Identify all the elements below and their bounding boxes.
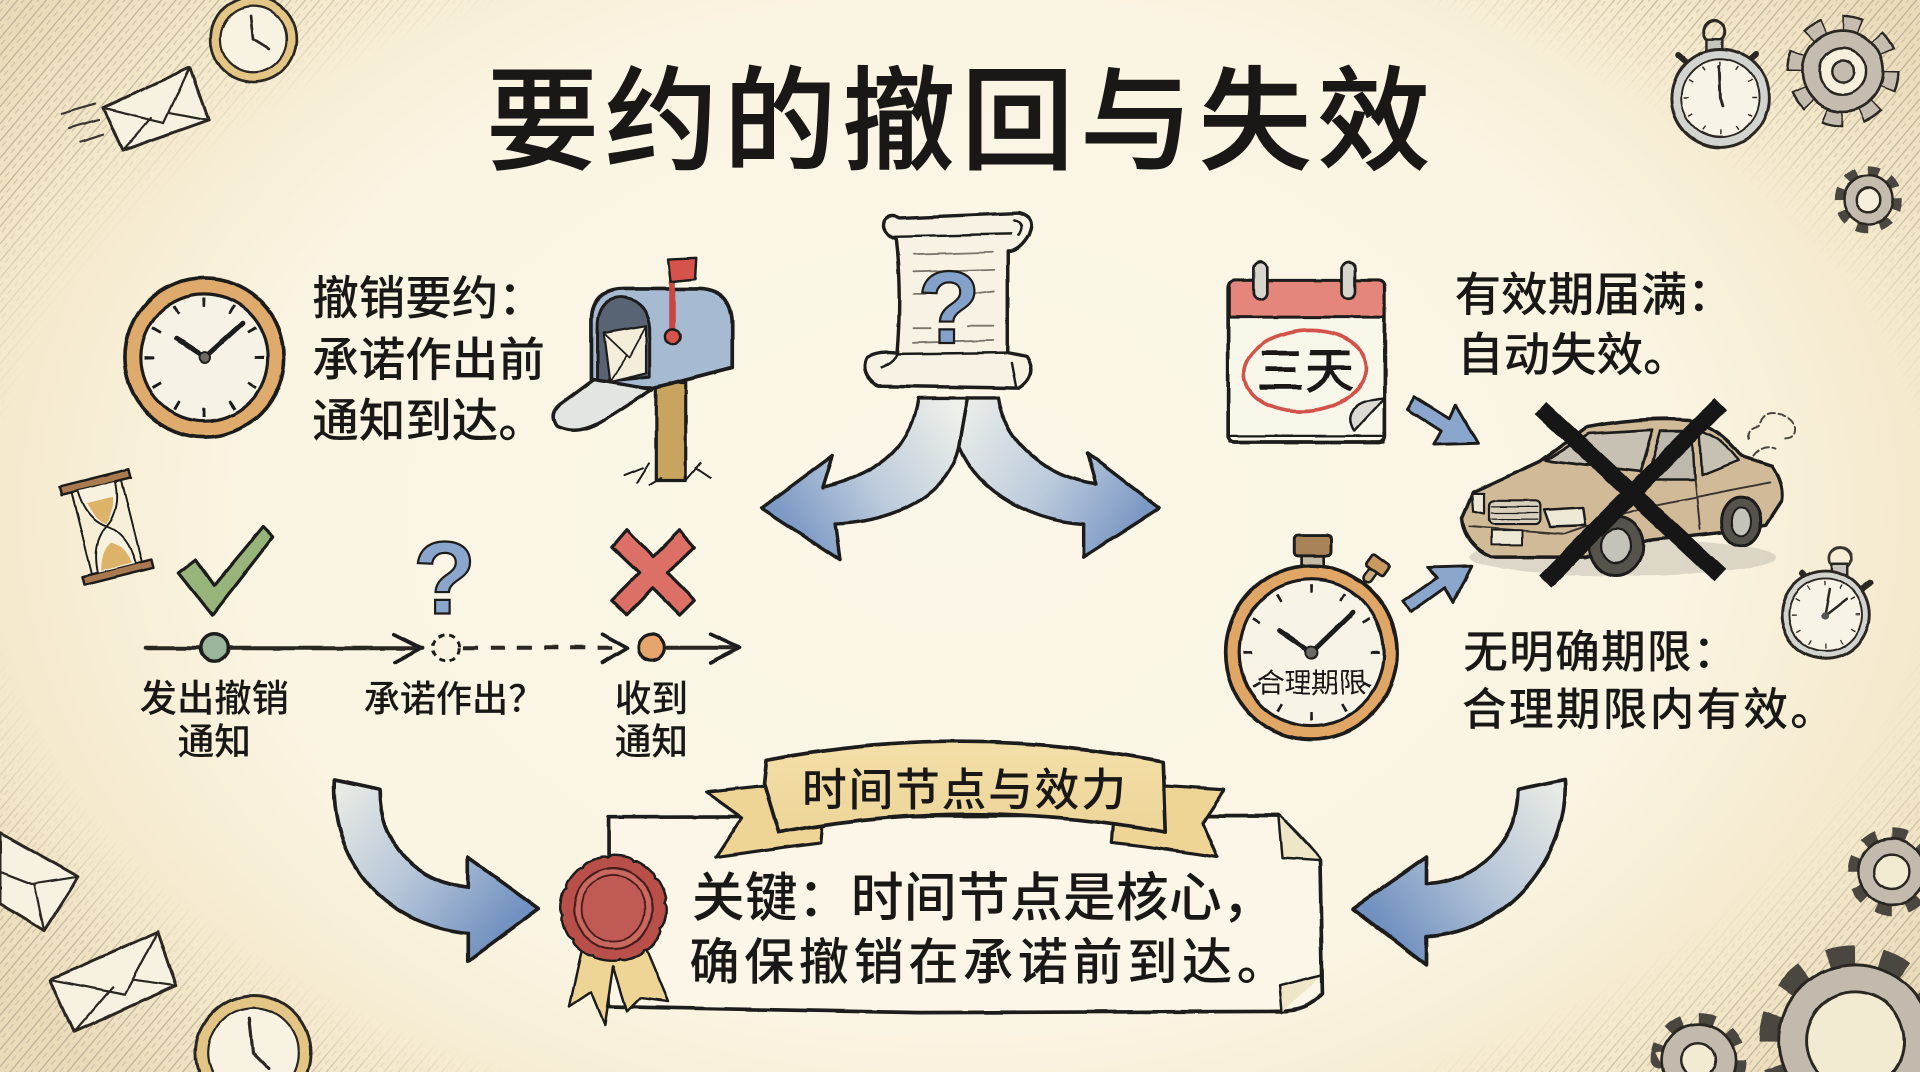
timeline label: receive xyxy=(615,668,688,765)
text: revoke offer: 撤销要约： xyxy=(312,262,545,329)
text: key message: 确保撤销在承诺前到达。 xyxy=(689,923,1287,995)
icon: top-right stopwatch xyxy=(1671,21,1769,147)
icon: top-right large gear xyxy=(1798,26,1888,116)
calendar label: 三天 xyxy=(1256,332,1354,403)
timeline node: received xyxy=(638,634,665,661)
timeline xyxy=(146,634,740,662)
timeline label: send xyxy=(140,668,289,765)
split arrow right xyxy=(959,398,1160,557)
icon: calendar xyxy=(1228,262,1385,442)
icon: small stopwatch xyxy=(1782,547,1871,659)
text: key message: 关键：时间节点是核心， xyxy=(692,856,1275,932)
icon: bottom-right gears xyxy=(1659,836,1920,1072)
icon: top-left envelope xyxy=(61,67,208,151)
stopwatch label: 合理期限 xyxy=(1256,660,1366,700)
icon: stopwatch with label xyxy=(1226,535,1397,740)
timeline node: sent xyxy=(201,634,228,661)
text: expiry: 自动失效。 xyxy=(1457,318,1690,385)
icon: wall clock xyxy=(125,278,284,437)
text: no fixed term: 无明确期限： xyxy=(1463,615,1739,680)
icon: bottom-left envelopes xyxy=(0,833,176,1032)
banner text: 时间节点与效力 xyxy=(802,754,1128,819)
wax seal xyxy=(566,862,669,1025)
icon: hourglass xyxy=(60,469,153,585)
timeline label: send: 通知 xyxy=(178,711,251,765)
banner tails xyxy=(707,786,1224,857)
timeline label: receive: 收到 xyxy=(615,668,688,722)
text: expiry: 有效期届满： xyxy=(1455,258,1734,325)
text: no fixed term: 合理期限内有效。 xyxy=(1462,673,1837,738)
curved arrow lower left xyxy=(334,780,539,961)
text: expiry xyxy=(1455,258,1734,385)
icon: top-right small gear xyxy=(1842,173,1895,227)
icon: bottom-left clock xyxy=(196,995,311,1072)
icon: scroll xyxy=(865,213,1031,388)
question mark on timeline: ? xyxy=(413,520,476,635)
icon: green check xyxy=(179,527,273,615)
timeline label: receive: 通知 xyxy=(615,711,688,765)
icon: red cross xyxy=(612,530,694,615)
timeline node: promise xyxy=(432,634,459,661)
title: 要约的撤回与失效 xyxy=(486,30,1436,193)
text: revoke offer xyxy=(312,262,545,451)
timeline label: promise: 承诺作出？ xyxy=(364,670,544,722)
split arrow left xyxy=(762,398,967,560)
icon: car with cross xyxy=(1462,404,1795,582)
timeline label: send: 发出撤销 xyxy=(140,668,289,722)
curved arrow lower right xyxy=(1353,780,1565,965)
arrow to car lower xyxy=(1403,566,1472,612)
text: revoke offer: 通知到达。 xyxy=(312,384,545,451)
question mark in scroll: ? xyxy=(918,250,980,365)
icon: top-left clock xyxy=(211,0,296,82)
banner xyxy=(764,742,1166,833)
text: revoke offer: 承诺作出前 xyxy=(312,323,545,390)
arrow to car upper xyxy=(1407,397,1478,444)
panel: key message xyxy=(566,742,1322,1025)
text: key message xyxy=(689,856,1287,995)
text: no fixed term xyxy=(1462,615,1837,738)
icon: mailbox xyxy=(554,258,732,485)
